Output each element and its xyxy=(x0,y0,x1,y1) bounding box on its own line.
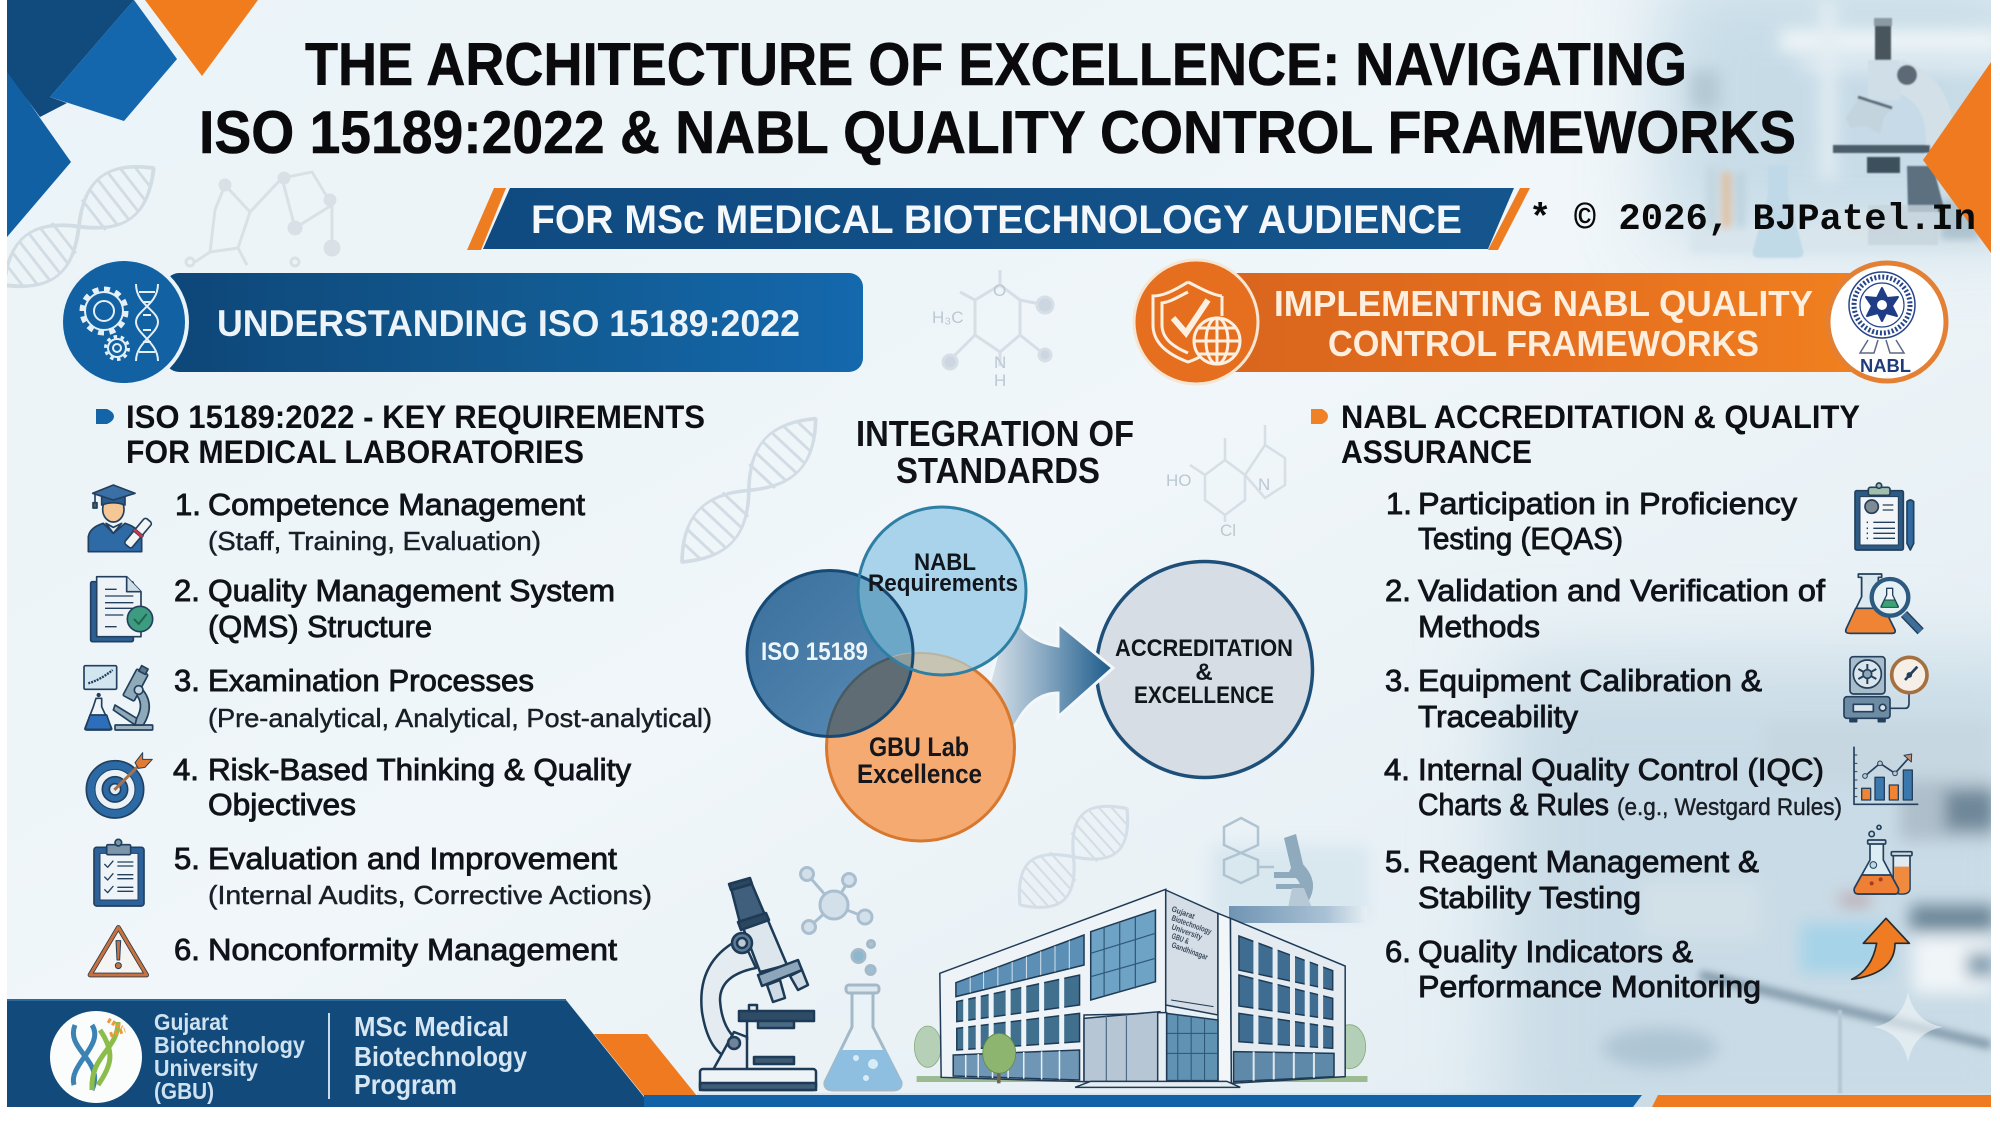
icon: warning triangle xyxy=(90,927,147,975)
icon: flask and magnifier xyxy=(1846,574,1921,633)
item 3: examination processes: 3. xyxy=(174,663,200,698)
item 6: nonconformity management: 6. xyxy=(174,932,200,967)
item 3: equipment calibration: Traceability xyxy=(1418,699,1578,734)
blurred laboratory backdrop bottom right xyxy=(1500,660,2000,1125)
building sign: Gujarat xyxy=(1170,904,1196,921)
section header: understanding ISO xyxy=(61,259,863,385)
item 6: quality indicators: Performance Monitoring xyxy=(1418,969,1761,1004)
outline: NABL xyxy=(858,507,1026,675)
item 5: evaluation and improvement xyxy=(174,841,652,910)
item 1: proficiency testing xyxy=(1386,486,1798,556)
right column heading: ASSURANCE xyxy=(1341,434,1532,470)
item 6: quality indicators xyxy=(1385,934,1761,1004)
left column heading xyxy=(96,405,704,464)
footer text: university: (GBU) xyxy=(154,1078,214,1104)
accreditation circle: ACCREDITATION xyxy=(1115,635,1293,662)
decoration: molecule centre right: Cl xyxy=(1220,521,1236,540)
left column heading: FOR MEDICAL LABORATORIES xyxy=(126,434,584,470)
item 1: competence management: (Staff, Training, Evaluation) xyxy=(208,526,541,556)
icon: NABL seal xyxy=(1828,263,1946,381)
item 5: reagent management: Reagent Management & xyxy=(1418,844,1759,879)
right icons xyxy=(1844,483,1927,979)
centre heading xyxy=(856,413,1134,491)
icon: graduate xyxy=(88,485,153,552)
accreditation circle xyxy=(1096,562,1312,778)
icon: document with check xyxy=(91,577,153,642)
item 4: internal quality control: Internal Quality Control (IQC) xyxy=(1418,752,1824,787)
icon: reagent flasks xyxy=(1854,825,1912,894)
microscope in backdrop xyxy=(1833,18,1953,245)
decoration: molecule with labels: H xyxy=(994,371,1006,390)
item 5: evaluation and improvement: (Internal Audits, Corrective Actions) xyxy=(208,880,652,910)
item 3: equipment calibration: Equipment Calibration & xyxy=(1418,663,1762,698)
molecule above flask xyxy=(800,868,872,934)
sparkle xyxy=(1873,992,1943,1062)
corner shape right xyxy=(1923,62,1991,253)
footer panel xyxy=(7,1000,697,1107)
arrow to accreditation xyxy=(985,605,1113,730)
item 4: risk-based thinking: 4. xyxy=(173,752,199,787)
decoration: molecule with labels xyxy=(932,270,1053,390)
corner shapes top left xyxy=(7,0,258,237)
icon: NABL seal: NABL xyxy=(1860,356,1911,376)
item 2: quality management system: (QMS) Structure xyxy=(208,609,432,644)
item 3: equipment calibration: 3. xyxy=(1385,663,1411,698)
item 1: proficiency testing: 1. xyxy=(1386,486,1412,521)
venn diagram: GBU Lab xyxy=(869,732,969,762)
item 5: evaluation and improvement: 5. xyxy=(174,841,200,876)
building sign xyxy=(1170,904,1213,962)
item 4: internal quality control xyxy=(1384,752,1842,822)
overlap: ISO and GBU xyxy=(826,653,1014,841)
building sign: Biotechnology xyxy=(1170,913,1213,936)
right wing xyxy=(1218,913,1231,1083)
item 5: reagent management: 5. xyxy=(1385,844,1411,879)
campus building xyxy=(914,889,1368,1087)
decoration: DNA centre left xyxy=(680,416,818,564)
venn diagram: Requirements xyxy=(868,570,1018,597)
icon: gears and DNA xyxy=(82,284,158,361)
item 3: examination processes xyxy=(174,663,712,733)
title: THE ARCHITECTURE OF EXCELLENCE: NAVIGATING xyxy=(305,31,1687,98)
bottom stripe xyxy=(644,1094,1991,1107)
building sign: GBU & xyxy=(1170,931,1190,946)
item 4: risk-based thinking: Objectives xyxy=(208,787,356,822)
item 6: quality indicators: Quality Indicators & xyxy=(1418,934,1693,969)
item 1: competence management xyxy=(175,487,585,556)
icon: microscope, flask and monitor xyxy=(84,664,153,730)
icon: centrifuge and gauge xyxy=(1844,657,1927,722)
item 2: validation and verification: 2. xyxy=(1385,573,1411,608)
decoration: DNA lower centre xyxy=(1018,804,1130,909)
item 2: validation and verification: Validation and Verification of xyxy=(1418,573,1825,608)
soft panel behind lower centre xyxy=(1210,845,1370,920)
item 3: equipment calibration xyxy=(1385,663,1762,734)
left column heading: ISO 15189:2022 - KEY REQUIREMENTS xyxy=(126,399,705,435)
footer text: program xyxy=(354,1011,527,1100)
circle: NABL requirements xyxy=(858,507,1026,675)
blurred laboratory backdrop top right xyxy=(1660,0,2000,258)
venn diagram xyxy=(747,507,1026,841)
item 3: examination processes: Examination Processes xyxy=(208,663,534,698)
icon: upward arrow xyxy=(1852,918,1909,979)
footer text: university: University xyxy=(154,1055,258,1081)
trees xyxy=(914,1025,1366,1069)
decoration: molecule top left xyxy=(186,172,339,266)
outline: ISO xyxy=(747,570,913,736)
item 1: proficiency testing: Participation in Proficiency xyxy=(1418,486,1798,521)
footer text: university: Biotechnology xyxy=(154,1032,305,1058)
item 6: quality indicators: 6. xyxy=(1385,934,1411,969)
footer text: program: MSc Medical xyxy=(354,1011,509,1042)
decoration: DNA top left xyxy=(7,165,156,288)
faded microscope and hexagons behind building xyxy=(1224,818,1367,923)
icon: proficiency clipboard xyxy=(1855,483,1914,550)
item 2: quality management system: Quality Management System xyxy=(208,573,615,608)
item 4: internal quality control: 4. xyxy=(1384,752,1410,787)
glass block xyxy=(1091,910,1155,1000)
subtitle banner: FOR MSc MEDICAL BIOTECHNOLOGY AUDIENCE xyxy=(531,198,1462,242)
footer text: university: Gujarat xyxy=(154,1009,228,1035)
item 1: competence management: Competence Management xyxy=(208,487,585,522)
title: ISO 15189:2022 & NABL QUALITY CONTROL FRAMEWORKS xyxy=(199,99,1796,166)
left wing xyxy=(940,889,1166,1082)
item 2: quality management system xyxy=(174,573,615,644)
front tree xyxy=(997,1063,1001,1083)
copyright line: * © 2026, BJPatel.In xyxy=(1529,199,1976,241)
entrance xyxy=(1084,1012,1160,1082)
right column heading xyxy=(1311,405,1860,464)
section header: implementing NABL: CONTROL FRAMEWORKS xyxy=(1328,323,1759,364)
icon: target xyxy=(86,753,152,818)
section header: implementing NABL xyxy=(1134,260,1946,384)
subtitle banner xyxy=(467,188,1530,250)
item 2: quality management system: 2. xyxy=(174,573,200,608)
icon: checklist clipboard xyxy=(94,839,144,906)
circle: ISO 15189 xyxy=(747,570,913,736)
item 4: risk-based thinking xyxy=(173,752,632,822)
centre heading: STANDARDS xyxy=(896,450,1100,491)
decoration: molecule with labels: N xyxy=(994,353,1006,372)
accreditation circle: EXCELLENCE xyxy=(1134,682,1274,709)
overlap: NABL and GBU xyxy=(826,653,1014,841)
title xyxy=(199,31,1796,166)
left list items xyxy=(173,487,712,967)
accreditation circle: & xyxy=(1195,659,1213,686)
section header: understanding ISO: UNDERSTANDING ISO 15189:2022 xyxy=(217,303,800,344)
building sign: Gandhinagar xyxy=(1170,940,1209,962)
footer text: program: Program xyxy=(354,1069,457,1100)
left icons xyxy=(84,485,153,975)
footer text: university xyxy=(154,1009,305,1104)
item 6: nonconformity management: Nonconformity Management xyxy=(208,932,617,967)
item 1: competence management: 1. xyxy=(175,487,201,522)
icon: shield and globe xyxy=(1153,282,1240,364)
decoration: molecule centre right: N xyxy=(1258,475,1270,494)
right column heading: NABL ACCREDITATION & QUALITY xyxy=(1341,399,1860,435)
item 5: reagent management xyxy=(1385,844,1759,915)
item 2: validation and verification xyxy=(1385,573,1825,644)
microscope illustration xyxy=(700,878,816,1090)
venn diagram: Excellence xyxy=(857,759,982,789)
icon: QC chart xyxy=(1854,747,1918,804)
circle: GBU lab excellence xyxy=(826,653,1014,841)
centre heading: INTEGRATION OF xyxy=(856,413,1134,454)
item 1: proficiency testing: Testing (EQAS) xyxy=(1418,521,1623,556)
item 4: risk-based thinking: Risk-Based Thinking & Quality xyxy=(208,752,632,787)
item 3: examination processes: (Pre-analytical, Analytical, Post-analytical) xyxy=(208,703,712,733)
decoration: molecule centre right: HO xyxy=(1166,471,1192,490)
decoration: molecule with labels: O xyxy=(993,281,1006,300)
overlap: all three xyxy=(826,653,1014,841)
right list items xyxy=(1384,486,1842,1004)
sign wall xyxy=(1166,890,1218,1015)
decoration: molecule centre right xyxy=(1166,425,1285,540)
footer text: program: Biotechnology xyxy=(354,1041,527,1072)
section header: implementing NABL: IMPLEMENTING NABL QUALITY xyxy=(1274,283,1813,324)
logo: GBU DNA xyxy=(50,1011,142,1103)
decoration: molecule with labels: H₃C xyxy=(932,308,963,327)
item 4: internal quality control: (e.g., Westgard Rules) xyxy=(1617,794,1842,821)
flask illustration xyxy=(825,940,901,1090)
item 2: validation and verification: Methods xyxy=(1418,609,1540,644)
venn diagram: ISO 15189 xyxy=(761,638,868,666)
venn diagram: NABL xyxy=(914,549,976,576)
building sign: University xyxy=(1170,922,1204,942)
item 5: evaluation and improvement: Evaluation and Improvement xyxy=(208,841,617,876)
overlap: ISO and NABL xyxy=(747,570,913,736)
item 4: internal quality control: Charts & Rules xyxy=(1418,787,1609,822)
item 5: reagent management: Stability Testing xyxy=(1418,880,1641,915)
